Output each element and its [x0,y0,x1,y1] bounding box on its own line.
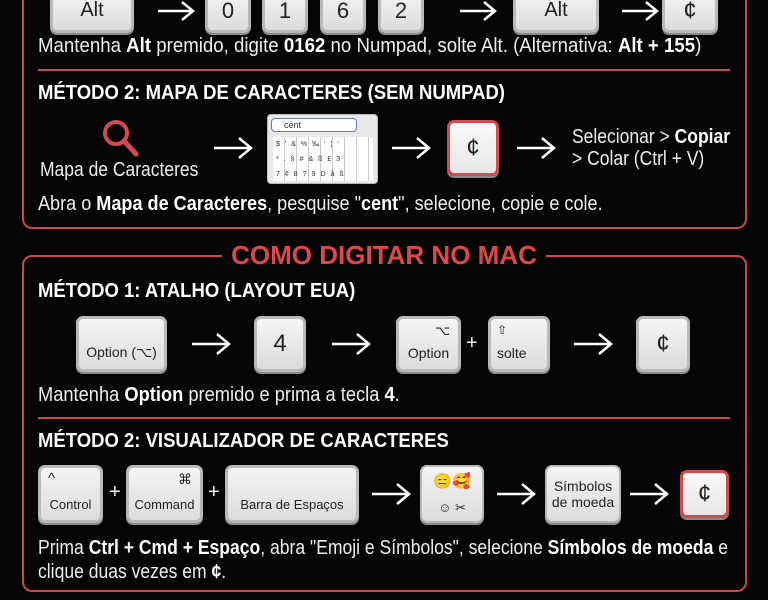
key row: viewer [38,465,729,525]
text: alt instructions: Mantenha Alt premido, digite 0162 no Numpad, solte Alt. (Alternativa: Alt + 155) [38,35,701,57]
key row: option 4: ⇧ [497,323,507,337]
icon: search [103,120,138,156]
icon: emoji panel: 😑🥰 [433,473,471,490]
text: viewer instructions [38,537,728,583]
panel: windows [22,0,747,229]
label: mapa de caracteres: Mapa de Caracteres [40,159,198,181]
key row: viewer: de moeda [552,494,614,510]
heading: metodo 1 mac: MÉTODO 1: ATALHO (LAYOUT EUA) [38,280,355,302]
key row: option 4: ⌥ [435,323,450,338]
text: mapa instructions: Abra o Mapa de Caracteres, pesquise "cent", selecione, copie e cole. [38,193,603,215]
title: mac: COMO DIGITAR NO MAC [231,240,537,270]
panel: mac [22,255,747,592]
key row: viewer: ¢ [698,480,711,507]
text: option instructions: Mantenha Option premido e prima a tecla 4. [38,384,400,406]
key row: viewer: + [109,481,121,503]
icon: emoji panel [420,465,484,523]
icon: cent key red [447,120,499,176]
text: selecionar copiar [572,126,730,170]
key row: option 4: 4 [273,330,287,357]
key row: option 4: solte [497,345,527,361]
icon: emoji panel: ☺ ✂ [438,500,466,515]
key row: viewer: Command [135,497,194,512]
icon: charmap window [267,114,378,184]
heading: metodo 2 mac: MÉTODO 2: VISUALIZADOR DE CARACTERES [38,430,449,452]
icon: charmap window: $'&%‰'¦' [276,141,344,148]
key row: option 4: Option (⌥) [86,344,157,360]
key row: option 4 [76,316,690,374]
key row: viewer: ^ [48,470,55,487]
key row: viewer: Barra de Espaços [240,497,344,512]
text: viewer instructions: Prima Ctrl + Cmd + Espaço, abra "Emoji e Símbolos", selecione Símbolos de moeda e [38,537,728,559]
key row: viewer: Símbolos [554,478,612,494]
heading: metodo 2 windows: MÉTODO 2: MAPA DE CARACTERES (SEM NUMPAD) [38,82,505,104]
icon: cent key red: ¢ [466,134,480,161]
key row: option 4: ¢ [656,330,670,357]
text: selecionar copiar: > Colar (Ctrl + V) [572,148,704,170]
key row: viewer: ⌘ [178,471,192,487]
key row: option 4: Option [408,345,449,361]
icon: charmap window: cent [284,120,301,130]
icon: charmap window: 7¢8?9Dåß [276,171,349,178]
text: viewer instructions: clique duas vezes em ¢. [38,561,226,583]
key row: viewer: + [208,481,220,503]
key row: alt code [50,0,718,35]
icon: charmap window: *.§#&ß£3 [276,156,345,163]
key row: option 4: + [466,332,478,354]
key row: viewer: Control [50,497,91,512]
text: selecionar copiar: Selecionar > Copiar [572,126,730,148]
